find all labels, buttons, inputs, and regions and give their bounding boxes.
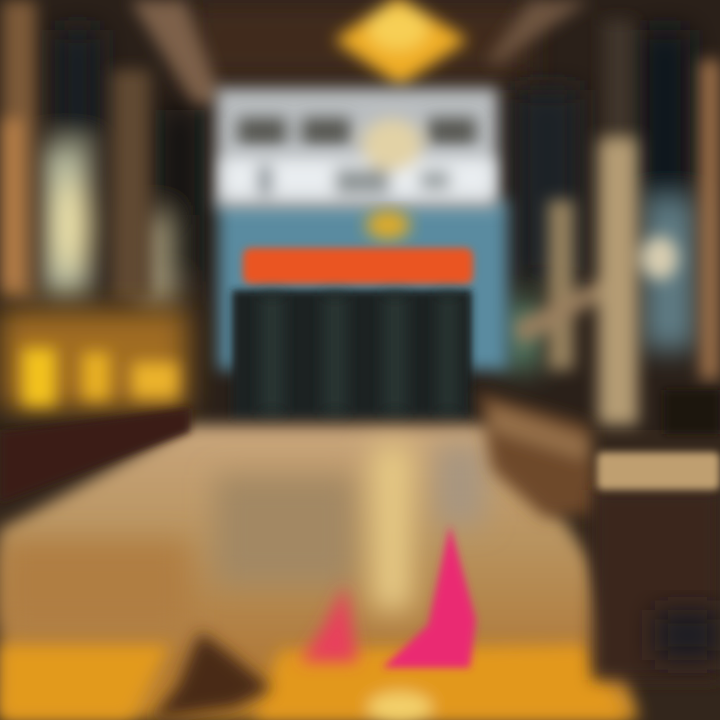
sign: dark columns panel bbox=[232, 290, 472, 420]
left columns bbox=[0, 0, 222, 300]
sign: title panel bbox=[216, 88, 498, 208]
title lettering blurred bbox=[222, 118, 494, 198]
left dark counter bbox=[0, 408, 190, 502]
icon: glowing bottles bbox=[22, 348, 178, 406]
right columns bbox=[488, 0, 720, 425]
pink shape left bbox=[300, 585, 358, 662]
right windows and dark wall bbox=[505, 30, 697, 370]
floor bbox=[0, 425, 640, 720]
bottom amber floor band bbox=[0, 645, 630, 720]
right chair bbox=[478, 392, 598, 518]
left windows bbox=[42, 30, 195, 305]
dark object on floor bbox=[150, 632, 272, 720]
right table bbox=[592, 452, 720, 680]
ceiling lamp bbox=[334, 0, 468, 86]
sign: blue backdrop bbox=[218, 200, 508, 370]
left amber shelf bbox=[0, 310, 188, 410]
sign: small gold emblem bbox=[366, 210, 410, 240]
right dark block bbox=[664, 390, 720, 434]
sign: orange banner bbox=[243, 248, 473, 284]
pink shape right bbox=[382, 525, 476, 668]
floor reflection bbox=[0, 445, 485, 630]
